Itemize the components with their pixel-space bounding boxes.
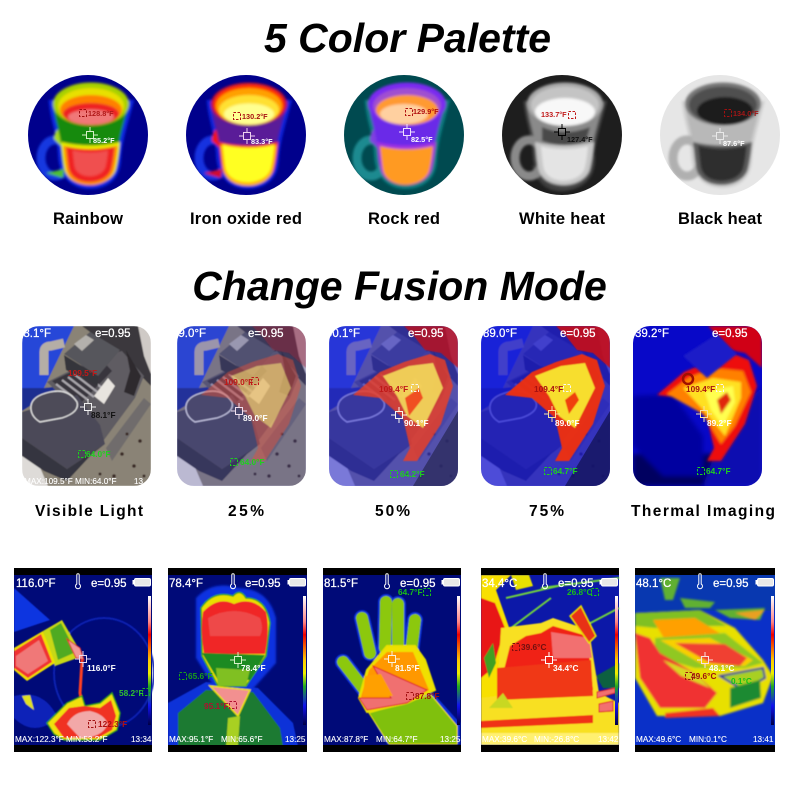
25% readouts: 89.0°F: [243, 413, 268, 423]
panel: fusion 75%: [481, 326, 610, 486]
transformer screen interface: 39.6°C: [521, 642, 546, 652]
masked face screen interface: MIN:65.6°F: [221, 735, 262, 744]
fusion label: Thermal Imaging: Thermal Imaging: [631, 503, 775, 520]
iron oxide readings: 130.2°F: [242, 112, 268, 121]
hand screen interface: 81.5°F: [324, 578, 358, 590]
car screen interface: 13:41: [753, 735, 774, 744]
50% readouts: 109.4°F: [379, 384, 408, 394]
fusion label: 75%: 75%: [529, 503, 564, 520]
palette label: White heat: White heat: [519, 210, 606, 228]
rock red readings: 129.9°F: [413, 107, 439, 116]
iron oxide readings: [234, 112, 273, 146]
panel: screen masked face: [168, 568, 307, 752]
rock red readings: 82.5°F: [411, 135, 433, 144]
thermal readouts: 89.2°F: [707, 418, 732, 428]
25% readouts: 109.0°F: [224, 377, 253, 387]
50% readouts: [326, 328, 444, 479]
50% readouts: 64.2°F: [400, 469, 425, 479]
rainbow readings: [80, 109, 115, 145]
hand screen interface: 81.5°F: [395, 663, 420, 673]
visible light readouts: 13: [134, 477, 144, 486]
white heat readings: 133.7°F: [541, 110, 567, 119]
thermal readouts: 109.4°F: [686, 384, 715, 394]
bottom left screen interface: 116.0°F: [16, 578, 56, 590]
panel: white heat mug: [502, 75, 622, 195]
black heat readings: 87.6°F: [723, 139, 745, 148]
panel: iron oxide red mug: [186, 75, 306, 195]
panel: rainbow mug: [28, 75, 148, 195]
palette label: Iron oxide red: Iron oxide red: [190, 210, 302, 228]
75% readouts: e=0.95: [560, 328, 596, 340]
visible light readouts: 88.1°F: [91, 410, 116, 420]
palette label: Black heat: Black heat: [678, 210, 762, 228]
transformer screen interface: 34.4°C: [482, 578, 517, 590]
masked face screen interface: 78.4°F: [241, 663, 266, 673]
title: 5 Color Palette: 5 Color Palette: [264, 15, 551, 61]
masked face screen interface: MAX:95.1°F: [169, 735, 213, 744]
masked face screen interface: 65.6°F: [188, 671, 213, 681]
75% readouts: [483, 328, 596, 476]
panel: black heat mug: [660, 75, 780, 195]
transformer screen interface: [482, 574, 619, 744]
visible light readouts: e=0.95: [95, 328, 130, 340]
black heat readings: [712, 109, 759, 148]
white heat readings: 127.4°F: [567, 135, 593, 144]
bottom left screen interface: 58.2°F: [119, 688, 144, 698]
visible light readouts: 64.0°F: [86, 449, 111, 459]
25% readouts: e=0.95: [248, 328, 284, 340]
hand screen interface: 64.7°F: [398, 587, 423, 597]
thermal readouts: 39.2°F: [635, 328, 669, 340]
bottom left screen interface: 116.0°F: [87, 663, 116, 673]
panel: screen car: [635, 568, 775, 752]
masked face screen interface: e=0.95: [245, 578, 280, 590]
car screen interface: 48.1°C: [709, 663, 734, 673]
25% readouts: [172, 328, 284, 467]
panel: screen transformer: [481, 568, 619, 752]
bottom left screen interface: e=0.95: [91, 578, 126, 590]
bottom left screen interface: 122.3°F: [98, 719, 127, 729]
hand screen interface: 87.8°F: [415, 691, 440, 701]
fusion label: Visible Light: Visible Light: [35, 503, 143, 520]
panel: fusion visible light: [17, 326, 151, 486]
palette label: Rainbow: Rainbow: [53, 210, 123, 228]
iron oxide readings: 83.3°F: [251, 137, 273, 146]
masked face screen interface: 13:25: [285, 735, 306, 744]
panel: screen hand: [323, 568, 461, 752]
hand screen interface: [324, 574, 461, 744]
transformer screen interface: e=0.95: [558, 578, 594, 590]
thermal readouts: 64.7°F: [706, 466, 731, 476]
75% readouts: 64.7°F: [553, 466, 578, 476]
transformer screen interface: 13:42: [598, 735, 619, 744]
75% readouts: 89.0°F: [483, 328, 517, 340]
rainbow readings: 128.8°F: [88, 109, 114, 118]
transformer screen interface: MIN:-26.8°C: [534, 735, 579, 744]
masked face screen interface: 78.4°F: [169, 578, 203, 590]
car screen interface: [636, 574, 774, 744]
50% readouts: e=0.95: [408, 328, 444, 340]
panel: fusion thermal imaging: [633, 326, 762, 486]
car screen interface: MIN:0.1°C: [689, 735, 727, 744]
visible light readouts: [17, 328, 144, 486]
fusion label: 50%: 50%: [375, 503, 410, 520]
hand screen interface: e=0.95: [400, 578, 436, 590]
title: Change Fusion Mode: Change Fusion Mode: [192, 263, 607, 309]
car screen interface: 49.6°C: [691, 671, 716, 681]
50% readouts: 90.1°F: [326, 328, 360, 340]
white heat readings: [541, 111, 592, 142]
panel: fusion 50%: [326, 326, 458, 486]
car screen interface: 0.1°C: [731, 676, 752, 686]
transformer screen interface: 26.8°C: [567, 587, 592, 597]
bottom left screen interface: 13:34: [131, 735, 152, 744]
bottom left screen interface: MAX:122.3°F MIN:53.2°F: [15, 735, 108, 744]
black heat readings: 134.0°F: [733, 109, 759, 118]
visible light readouts: 68.1°F: [17, 328, 51, 340]
fusion label: 25%: 25%: [228, 503, 264, 520]
masked face screen interface: 95.1°F: [204, 701, 229, 711]
25% readouts: 64.0°F: [240, 457, 265, 467]
visible light readouts: 109.5°F: [68, 368, 97, 378]
75% readouts: 109.4°F: [534, 384, 563, 394]
75% readouts: 89.0°F: [555, 418, 580, 428]
transformer screen interface: MAX:39.6°C: [482, 735, 527, 744]
rock red readings: [399, 107, 439, 144]
bottom left screen interface: [15, 574, 152, 744]
thermal readouts: e=0.95: [712, 328, 748, 340]
car screen interface: e=0.95: [713, 578, 748, 590]
thermal readouts: [635, 328, 748, 476]
palette label: Rock red: Rock red: [368, 210, 440, 228]
masked face screen interface: [169, 574, 306, 744]
hand screen interface: 13:25: [440, 735, 461, 744]
visible light readouts: MAX:109.5°F MIN:64.0°F: [24, 477, 117, 486]
hand screen interface: MIN:64.7°F: [376, 735, 418, 744]
car screen interface: 48.1°C: [636, 578, 671, 590]
panel: fusion 25%: [172, 326, 306, 486]
transformer screen interface: 34.4°C: [553, 663, 578, 673]
rainbow readings: 85.2°F: [93, 136, 115, 145]
25% readouts: 89.0°F: [172, 328, 206, 340]
panel: screen pouring water: [14, 568, 154, 752]
hand screen interface: MAX:87.8°F: [324, 735, 368, 744]
panel: rock red mug: [344, 75, 464, 195]
car screen interface: MAX:49.6°C: [636, 735, 681, 744]
50% readouts: 90.1°F: [404, 418, 429, 428]
